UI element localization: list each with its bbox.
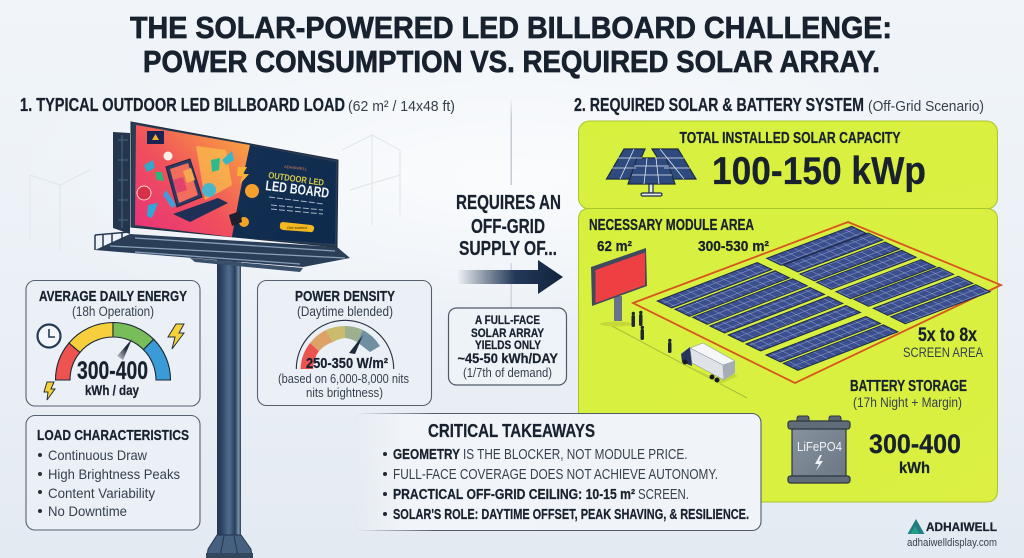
gauge needle: [117, 339, 132, 360]
panel: critical takeaways: IS THE BLOCKER, NOT MODULE PRICE.: [463, 447, 688, 463]
panel: average daily energy: 300-400: [77, 357, 148, 385]
panel: total installed solar capacity: TOTAL INSTALLED SOLAR CAPACITY: [680, 130, 901, 147]
panel: power density: 250-350 W/m²: [306, 356, 388, 372]
panel: load characteristics: Continuous Draw: [48, 447, 148, 463]
billboard logo: [147, 131, 164, 144]
icon: clock: [38, 324, 60, 348]
panel: load characteristics: LOAD CHARACTERISTICS: [37, 427, 189, 444]
panel: total installed solar capacity: [578, 121, 998, 209]
text: requires an off-grid supply: REQUIRES AN: [456, 192, 561, 214]
solar perimeter: [633, 222, 1001, 383]
text: requires an off-grid supply: SUPPLY OF...: [459, 238, 557, 260]
panel: necessary module area and battery: 300-400: [869, 429, 961, 459]
panel: necessary module area and battery: NECESSARY MODULE AREA: [589, 217, 754, 234]
title: [130, 10, 892, 79]
icon: solar panel: [606, 149, 696, 196]
panel: necessary module area and battery: (17h Night + Margin): [853, 395, 962, 410]
title: POWER CONSUMPTION VS. REQUIRED SOLAR ARRAY.: [143, 44, 880, 79]
panel: power density: (Daytime blended): [297, 304, 393, 319]
panel: average daily energy: [26, 280, 200, 406]
panel: total installed solar capacity: 100-150 kWp: [712, 150, 926, 193]
icon: battery: [788, 416, 850, 483]
phone graphic: [137, 146, 259, 227]
billboard text: ADHAIWELL: [284, 164, 308, 171]
panel: necessary module area and battery: kWh: [899, 460, 930, 477]
icon: people: [632, 311, 672, 353]
billboard text: [265, 164, 330, 232]
icon: small red billboard: [591, 248, 647, 326]
panel: necessary module area and battery: 5x to 8x: [918, 325, 977, 346]
panel: critical takeaways: FULL-FACE COVERAGE DOES NOT ACHIEVE AUTONOMY.: [393, 467, 718, 483]
panel: necessary module area and battery: SCREEN AREA: [903, 344, 984, 360]
icon: battery: LiFePO4: [797, 439, 842, 454]
panel: critical takeaways: [355, 414, 761, 530]
panel: necessary module area and battery: 62 m²: [597, 239, 632, 255]
panel: load characteristics: High Brightness Peaks: [48, 466, 180, 482]
icon: bolt left: [44, 382, 55, 400]
panel: power density: [258, 280, 432, 406]
arrow: [457, 260, 563, 294]
text: requires an off-grid supply: [456, 192, 561, 260]
panel: critical takeaways: PRACTICAL OFF-GRID CEILING: 10-15 m²: [393, 487, 635, 503]
heading: section 1: 1. TYPICAL OUTDOOR LED BILLBOARD LOAD: [20, 95, 345, 115]
panel: necessary module area and battery: [578, 208, 1001, 502]
callout: full-face yield: YIELDS ONLY: [475, 338, 541, 352]
heading: section 2: 2. REQUIRED SOLAR & BATTERY SYSTEM: [574, 95, 864, 115]
logo: adhaiwell: ADHAIWELL: [926, 522, 997, 534]
panel: necessary module area and battery: 300-530 m²: [698, 239, 769, 255]
panel: load characteristics: Content Variability: [48, 485, 155, 501]
logo: adhaiwell: [907, 519, 997, 549]
billboard text: Get started: [287, 225, 307, 230]
panel: average daily energy: AVERAGE DAILY ENERGY: [39, 289, 187, 305]
billboard text: LED BOARD: [265, 177, 330, 201]
divider lines: [510, 97, 512, 308]
panel: necessary module area and battery: BATTERY STORAGE: [850, 378, 967, 395]
panel: critical takeaways: CRITICAL TAKEAWAYS: [428, 421, 595, 441]
billboard back frame: [113, 132, 130, 234]
panel: critical takeaways: SCREEN.: [638, 487, 689, 503]
gauge: power density: [296, 320, 394, 369]
panel: load characteristics: [26, 416, 200, 530]
billboard illustration: [95, 122, 350, 558]
solar array rows: [657, 226, 990, 370]
heading: section 1: (62 m² / 14x48 ft): [348, 98, 455, 115]
panel: power density: (based on 6,000-8,000 nits: [278, 371, 409, 386]
panel: average daily energy: kWh / day: [85, 382, 139, 398]
icon: bolt right: [168, 324, 184, 349]
callout: full-face yield: A FULL-FACE: [475, 313, 540, 327]
billboard text: OUTDOOR LED: [268, 170, 325, 188]
callout: full-face yield: ~45-50 kWh/DAY: [458, 350, 559, 366]
billboard screen: [131, 122, 338, 247]
panel: power density: POWER DENSITY: [295, 289, 395, 305]
panel: critical takeaways: SOLAR'S ROLE: DAYTIME OFFSET, PEAK SHAVING, & RESILIENCE.: [393, 507, 749, 523]
panel: load characteristics: No Downtime: [48, 503, 127, 519]
panel: average daily energy: (18h Operation): [72, 304, 154, 319]
gauge: daily energy: [56, 322, 171, 380]
billboard pole: [206, 252, 253, 558]
callout: full-face yield: [448, 308, 566, 385]
panel: critical takeaways: GEOMETRY: [393, 447, 460, 463]
billboard platform: [95, 232, 350, 272]
icon: truck: [681, 343, 738, 384]
logo: adhaiwell: adhaiwelldisplay.com: [907, 537, 997, 549]
text: requires an off-grid supply: OFF-GRID: [471, 216, 545, 238]
panel: power density: nits brightness): [306, 385, 383, 400]
heading: section 2: (Off-Grid Scenario): [868, 98, 984, 115]
callout: full-face yield: SOLAR ARRAY: [471, 326, 544, 340]
title: THE SOLAR-POWERED LED BILLBOARD CHALLENGE:: [130, 10, 892, 45]
callout: full-face yield: (1/7th of demand): [463, 366, 552, 380]
